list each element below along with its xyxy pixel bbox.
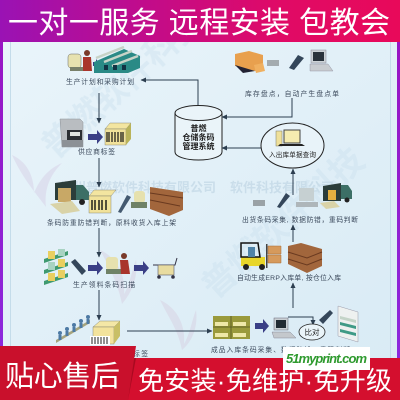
compare ellipse bbox=[299, 324, 325, 340]
icon: scanner bbox=[71, 259, 86, 275]
label: 生产领料条码扫描 bbox=[73, 280, 135, 289]
icon: computer bbox=[272, 318, 296, 338]
step: finished goods inbound bbox=[211, 306, 358, 354]
step: auto ERP inbound bbox=[237, 243, 341, 282]
database label: 仓储条码 bbox=[182, 132, 214, 142]
icon: computer bbox=[310, 50, 333, 71]
icon: computer bbox=[276, 130, 305, 146]
icon: material shelves bbox=[44, 249, 68, 285]
icon: computer bbox=[296, 188, 318, 207]
after-sales block bbox=[0, 346, 136, 400]
watermark: 普燃软件科技 bbox=[195, 141, 372, 306]
icon: stacked cartons bbox=[213, 316, 250, 339]
icon: conveyor line bbox=[94, 47, 140, 73]
label: 生产计划和采购计划 bbox=[66, 77, 134, 86]
step: supplier label bbox=[60, 119, 131, 156]
step: outbound scan bbox=[242, 183, 358, 224]
icon: trolley bbox=[153, 258, 177, 279]
watermark: 软件科技有限公司 bbox=[230, 180, 334, 195]
icon: forklift bbox=[241, 243, 281, 270]
icon: production workers bbox=[56, 315, 90, 343]
icon: orange cartons bbox=[235, 51, 265, 73]
icon: delivery truck bbox=[50, 180, 89, 214]
icon: data sheet bbox=[338, 306, 358, 342]
step: production line label bbox=[56, 315, 148, 358]
icon: barcode box bbox=[90, 321, 120, 345]
label: 供应商标签 bbox=[78, 147, 115, 156]
icon: label printer bbox=[60, 119, 83, 147]
icon: operator bbox=[131, 191, 147, 208]
step: stocktake bbox=[235, 50, 339, 98]
icon: brown shelf bbox=[288, 243, 322, 273]
icon: delivery truck bbox=[320, 183, 352, 209]
after-sales text: 贴心售后 bbox=[5, 360, 120, 393]
step: production material scan bbox=[44, 249, 177, 289]
watermark: 郑州普燃软件科技有限公司 bbox=[60, 180, 216, 195]
icon: operator at computer bbox=[68, 50, 92, 71]
icon: barcode box bbox=[89, 190, 116, 213]
icon: barcode box bbox=[105, 123, 131, 145]
header text: 一对一服务 远程安装 包教会 bbox=[8, 7, 390, 40]
header banner bbox=[0, 0, 400, 42]
icon: scanner bbox=[277, 193, 290, 208]
icon: scanner bbox=[319, 310, 333, 324]
icon: barcode bbox=[254, 200, 264, 206]
connector arrows bbox=[99, 80, 313, 331]
footer band bbox=[125, 358, 400, 400]
label: 出货条码采集, 数据防错，重码判断 bbox=[242, 215, 358, 224]
footer slogan: 免安装·免维护·免升级 bbox=[138, 366, 392, 396]
database: warehouse system bbox=[175, 106, 222, 160]
database label: 普燃 bbox=[190, 123, 206, 133]
database label: 管理系统 bbox=[182, 141, 214, 151]
label: 条码防重防错判断，原料收货入库上架 bbox=[47, 218, 176, 227]
icon: barcode bbox=[268, 60, 278, 66]
icon: barcode scanner bbox=[118, 195, 131, 213]
label: 自动生成ERP入库单, 按仓位入库 bbox=[237, 273, 341, 282]
watermark bbox=[12, 1, 372, 350]
compare text: 比对 bbox=[304, 327, 320, 337]
icon: operator bbox=[106, 253, 130, 274]
label: 标签 bbox=[133, 349, 148, 358]
logo text: 51myprint.com bbox=[286, 351, 367, 366]
icon: brown shelf bbox=[150, 187, 183, 216]
step: document query bbox=[261, 123, 324, 168]
label: 入出库单据查询 bbox=[269, 150, 316, 159]
watermark: 普燃软件科技 bbox=[35, 1, 212, 166]
step: production planning bbox=[66, 47, 140, 86]
icon: scanner bbox=[289, 55, 304, 70]
step: receiving bbox=[47, 180, 183, 227]
block arrows bbox=[88, 59, 269, 333]
label: 成品入库条码采集、数据防错、重码判断 bbox=[211, 345, 350, 354]
label: 库存盘点，自动产生盘点单 bbox=[245, 89, 339, 98]
source logo bbox=[283, 347, 370, 370]
